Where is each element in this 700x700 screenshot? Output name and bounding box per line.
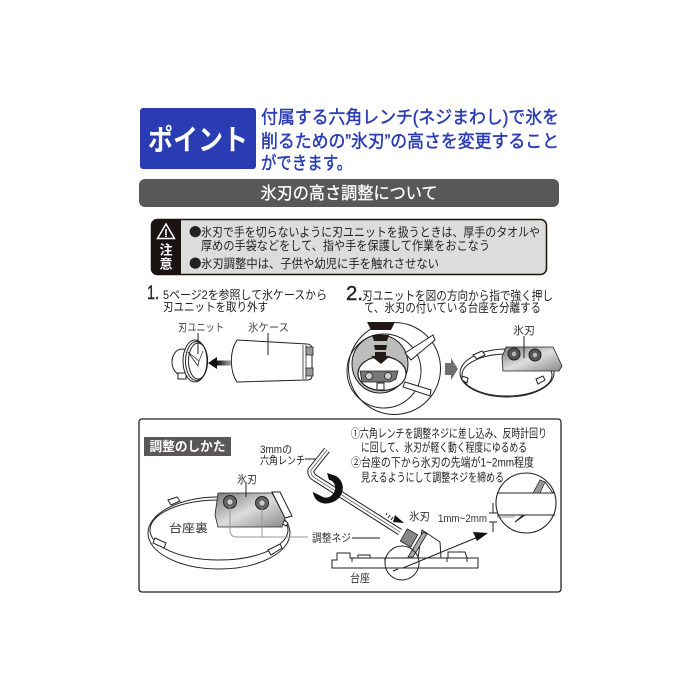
caution label xyxy=(159,242,173,272)
arrow: magnify xyxy=(403,532,488,568)
caution text xyxy=(189,222,540,272)
icon: hex wrench xyxy=(311,450,400,532)
leader lines xyxy=(230,506,308,537)
panel heading: 調整のしかた xyxy=(150,439,226,454)
arrow: next step xyxy=(445,358,458,380)
caution text: ● xyxy=(189,222,202,240)
step 1 heading: 5ページ2を参照して氷ケースから xyxy=(163,288,327,302)
caution text: ● xyxy=(189,253,202,272)
icon: blade unit xyxy=(172,333,208,382)
step 2 heading: て、氷刃の付いている台座を分離する xyxy=(364,300,541,315)
instructions: ①六角レンチを調整ネジに差し込み、反時計回り xyxy=(351,426,547,440)
label: protrusion: 1mm~2mm xyxy=(438,513,487,525)
step 1 heading: 刃ユニットを取り外す xyxy=(163,300,268,314)
icon: direction arrow xyxy=(386,513,404,523)
icon: detached base xyxy=(460,324,562,397)
step 2 heading xyxy=(346,283,553,315)
step 2 heading: 2. xyxy=(346,283,363,305)
label: wrench size: 六角レンチ xyxy=(260,454,305,467)
caution panel xyxy=(151,219,546,275)
caution text: 厚めの手袋などをして、指や手を保護して作業をおこなう xyxy=(201,238,490,253)
icon: blade plate xyxy=(215,492,292,527)
label: wrench size: 3mmの xyxy=(260,444,292,456)
arrow: push direction xyxy=(367,322,395,364)
intro text: 付属する六角レンチ(ネジまわし)で氷を xyxy=(261,108,559,128)
instructions: ②台座の下から氷刃の先端が1~2mm程度 xyxy=(351,454,534,470)
point badge: ポイント xyxy=(148,124,248,157)
step 1 heading xyxy=(147,283,327,314)
step 1 diagram xyxy=(172,321,313,382)
label: blade: 氷刃 xyxy=(513,324,535,337)
section heading bar xyxy=(139,179,559,207)
arrow: remove unit xyxy=(208,357,231,369)
side view diagram xyxy=(332,473,556,585)
point badge xyxy=(140,108,256,169)
intro text: 削るための”氷刃”の高さを変更すること xyxy=(261,132,559,152)
icon: rotation arrow xyxy=(313,473,343,504)
caution label: 意 xyxy=(159,256,173,272)
intro text: ができます。 xyxy=(261,154,352,174)
caution label: 注 xyxy=(159,242,173,258)
step 1 heading: 1. xyxy=(147,283,159,304)
panel: adjustment method xyxy=(139,419,561,592)
section heading bar: 氷刃の高さ調整について xyxy=(260,184,438,203)
caution text: 氷刃で手を切らないように刃ユニットを扱うときは、厚手のタオルや xyxy=(201,226,540,240)
label: base: 台座 xyxy=(350,571,370,585)
caution text: 氷刃調整中は、子供や幼児に手を触れさせない xyxy=(201,256,439,271)
label: adjusting screw: 調整ネジ xyxy=(312,530,351,544)
icon: holder and screw xyxy=(400,529,441,558)
magnified view xyxy=(496,473,556,533)
label: ice case: 氷ケース xyxy=(248,321,289,334)
instructions xyxy=(351,426,547,484)
icon: warning triangle xyxy=(158,224,174,238)
dimension marks xyxy=(489,503,497,532)
instructions: に回して、氷刃が軽く動く程度にゆるめる xyxy=(361,440,527,454)
intro text xyxy=(261,108,559,174)
step 2 heading: 刃ユニットを図の方向から指で強く押し xyxy=(362,288,553,303)
instructions: 見えるようにして調整ネジを締める xyxy=(361,470,504,484)
label: blade unit: 刃ユニット xyxy=(178,322,224,334)
label: blade: 氷刃 xyxy=(237,473,257,486)
icon: pressing unit xyxy=(347,322,440,414)
icon: ice case xyxy=(231,333,313,382)
base ring diagram xyxy=(148,473,380,569)
label: base back: 台座裏 xyxy=(169,521,209,535)
label: wrench size xyxy=(260,444,320,467)
step 2 diagram xyxy=(347,322,562,414)
label: blade: 氷刃 xyxy=(409,510,430,523)
